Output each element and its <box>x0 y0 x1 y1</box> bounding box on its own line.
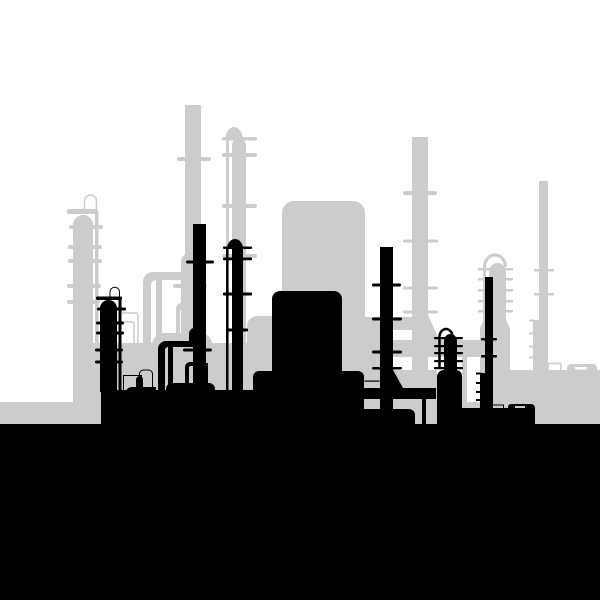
black column with loop <box>434 329 463 425</box>
black column with side pipe <box>223 239 252 392</box>
background refinery layer (grey) <box>0 105 600 426</box>
foreground refinery layer (black) <box>0 224 600 600</box>
grey thin stack far right <box>529 181 554 372</box>
grey left column tower <box>67 195 103 403</box>
grey tall stack with pipes <box>143 105 212 355</box>
grey low tank and pipe right <box>548 364 597 374</box>
black small vessels <box>124 370 156 392</box>
grey column with loop <box>222 127 257 345</box>
grey ground band <box>0 201 600 426</box>
black stack with bent pipes <box>158 224 215 394</box>
thin grey loops behind left tower <box>122 313 138 343</box>
black ground <box>0 390 600 600</box>
black left column tower <box>95 287 126 392</box>
grey right column with loop <box>478 255 513 375</box>
black central tank <box>253 291 364 392</box>
grey stack centre right <box>403 137 438 370</box>
black horizontal pipe and support <box>364 380 436 425</box>
black stack centre right <box>372 247 403 425</box>
black low tank and pipe right <box>492 404 535 411</box>
black thin stack right <box>476 277 497 412</box>
